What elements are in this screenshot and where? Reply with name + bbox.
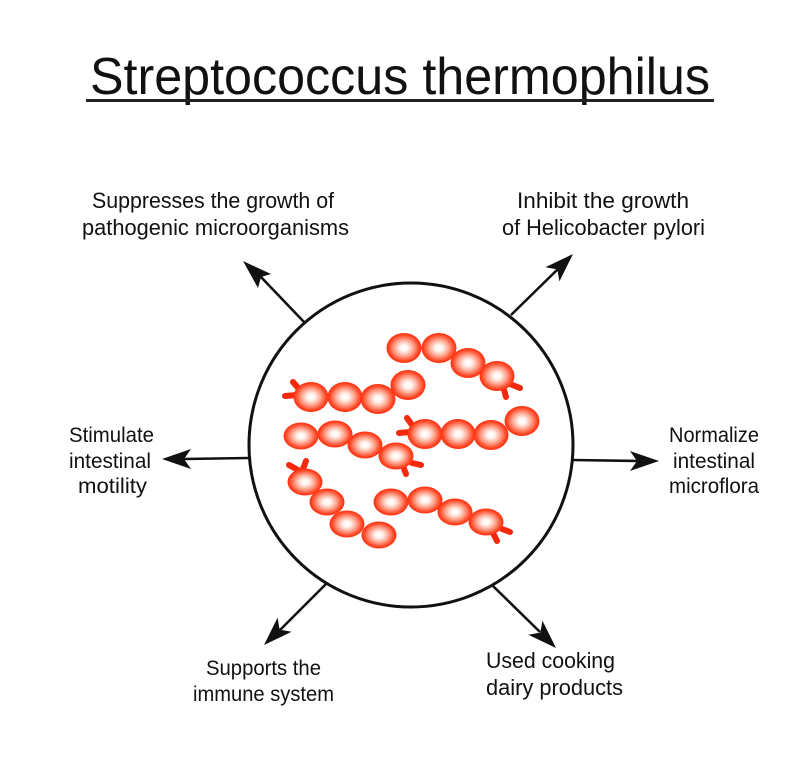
text: stimulate motility: intestinal: [69, 450, 151, 473]
text: immune system: immune system: [193, 683, 334, 706]
text: immune system: [193, 657, 334, 706]
bacteria chain 2: [285, 370, 426, 414]
text: normalize microflora: [669, 424, 759, 498]
text: inhibit helicobacter: [502, 188, 705, 240]
text: normalize microflora: microflora: [669, 475, 759, 498]
title: Streptococcus thermophilus: [90, 48, 710, 106]
arrow: north-east: [511, 254, 573, 315]
text: inhibit helicobacter: Inhibit the growth: [517, 188, 689, 213]
bacteria chain 4: [399, 406, 540, 450]
arrow: south-east: [493, 586, 556, 648]
bacteria chain 5: [288, 461, 396, 548]
circle: bacteria view: [249, 283, 573, 607]
text: suppresses pathogens: Suppresses the growth of: [92, 188, 335, 213]
bacteria chain 1: [386, 333, 520, 397]
bacteria chain 6: [374, 486, 510, 541]
text: dairy products: [486, 648, 623, 700]
text: stimulate motility: [69, 424, 154, 498]
arrow: north-west: [243, 261, 304, 322]
text: stimulate motility: Stimulate: [69, 424, 154, 447]
text: stimulate motility: motility: [78, 475, 148, 498]
arrow: east: [572, 451, 659, 471]
text: dairy products: Used cooking: [486, 648, 615, 673]
text: inhibit helicobacter: of Helicobacter pylori: [502, 215, 705, 240]
bacteria chain 3: [284, 420, 421, 474]
text: suppresses pathogens: [82, 188, 349, 240]
text: normalize microflora: intestinal: [673, 450, 755, 473]
text: suppresses pathogens: pathogenic microorganisms: [82, 215, 349, 240]
text: normalize microflora: Normalize: [669, 424, 759, 447]
arrow: west: [162, 449, 249, 469]
arrow: south-west: [264, 584, 326, 645]
text: immune system: Supports the: [206, 657, 321, 680]
text: dairy products: dairy products: [486, 675, 623, 700]
